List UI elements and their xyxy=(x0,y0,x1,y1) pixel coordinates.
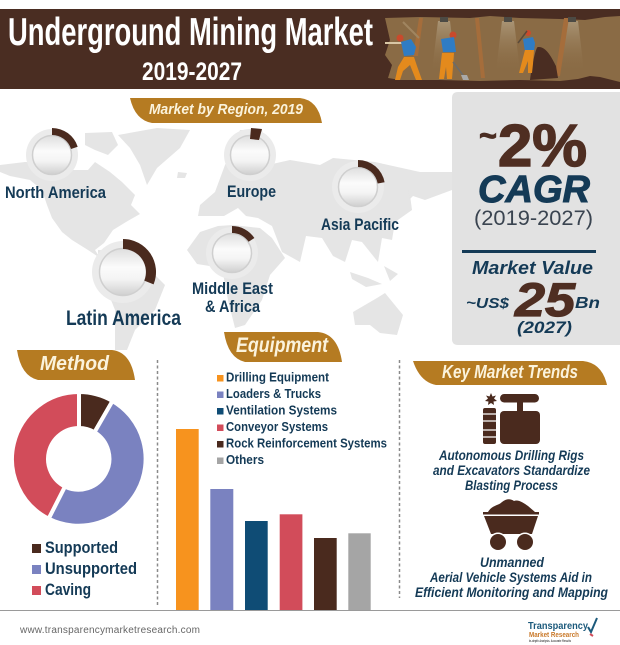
logo xyxy=(528,618,597,643)
region labels: North America xyxy=(5,183,106,202)
trend text: blasting: and Excavators Standardize xyxy=(433,462,590,478)
section ribbon: method: Method xyxy=(40,353,110,375)
legend: equipment: Loaders & Trucks xyxy=(226,386,321,401)
footer url: www.transparencymarketresearch.com xyxy=(19,625,200,636)
section ribbon: market by region xyxy=(130,98,322,123)
donut chart: method xyxy=(12,392,146,526)
icon: detonator and dynamite xyxy=(483,393,540,444)
region labels xyxy=(5,182,399,330)
miner three xyxy=(518,30,535,73)
title: Underground Mining Market xyxy=(8,11,373,54)
section ribbon: equipment xyxy=(224,332,342,362)
trend text: blasting: Autonomous Drilling Rigs xyxy=(438,447,584,463)
trend text: blasting xyxy=(433,447,590,493)
icon: mine cart xyxy=(483,499,539,552)
market value year: (2027) xyxy=(517,318,572,337)
logo: Market Research xyxy=(529,630,579,639)
section ribbon: equipment: Equipment xyxy=(236,334,329,357)
market value label: Market Value xyxy=(472,258,593,278)
logo: In-depth Analysis. Accurate Results xyxy=(529,639,571,643)
legend: equipment xyxy=(217,370,387,467)
trend text: blasting: Blasting Process xyxy=(465,477,558,493)
tilde: ~ xyxy=(479,117,497,155)
panel: CAGR and market value: Bn xyxy=(575,295,600,312)
header banner xyxy=(0,9,620,89)
donut: Latin America xyxy=(92,239,156,303)
legend: method: Caving xyxy=(45,580,91,599)
trend text: unmanned xyxy=(415,554,608,600)
trend text: unmanned: Unmanned xyxy=(480,554,544,570)
trend text: unmanned: Aerial Vehicle Systems Aid in xyxy=(429,569,592,585)
donut: Middle East and Africa xyxy=(206,226,258,279)
bar chart: equipment xyxy=(176,429,371,610)
miner one xyxy=(385,34,422,80)
legend: equipment: Conveyor Systems xyxy=(226,419,328,434)
legend: equipment: Drilling Equipment xyxy=(226,370,330,384)
section ribbon: key market trends xyxy=(413,361,607,385)
miner two xyxy=(439,32,469,80)
legend: method xyxy=(32,538,137,599)
legend: equipment: Ventilation Systems xyxy=(226,402,337,418)
region labels: Latin America xyxy=(66,307,181,330)
section ribbon: method xyxy=(17,350,135,380)
section ribbon: market by region: Market by Region, 2019 xyxy=(149,101,304,118)
region labels: & Africa xyxy=(205,297,260,316)
CAGR period: (2019-2027) xyxy=(474,207,593,230)
legend: equipment: Others xyxy=(226,452,264,467)
donut: Asia Pacific xyxy=(332,160,385,213)
world map xyxy=(0,128,452,350)
donut: North America xyxy=(26,128,78,181)
panel: CAGR and market value: 25 xyxy=(514,273,576,326)
CAGR value: 2% xyxy=(498,113,587,179)
mining illustration xyxy=(385,16,620,82)
logo: Transparency xyxy=(528,620,588,632)
legend: method: Supported xyxy=(45,538,118,557)
legend: equipment: Rock Reinforcement Systems xyxy=(226,436,387,450)
region labels: Europe xyxy=(227,182,276,201)
subtitle years: 2019-2027 xyxy=(142,58,242,86)
donut: Europe xyxy=(224,128,276,181)
region labels: Asia Pacific xyxy=(321,215,399,234)
region labels: Middle East xyxy=(192,279,273,298)
CAGR label: CAGR xyxy=(478,169,591,211)
market value figure: ~US$ xyxy=(466,295,510,312)
legend: method: Unsupported xyxy=(45,559,137,578)
section ribbon: key market trends: Key Market Trends xyxy=(442,362,578,382)
panel: CAGR and market value xyxy=(452,92,620,345)
